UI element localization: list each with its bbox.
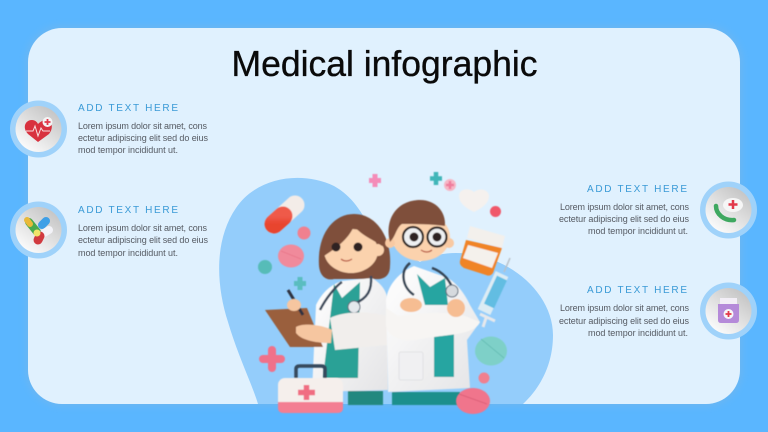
pink tablet bottom xyxy=(456,388,490,414)
icon: heart xyxy=(459,189,489,212)
body text: Lorem ipsum dolor sit amet, cons xyxy=(78,223,208,233)
scrubs xyxy=(417,274,448,305)
coat xyxy=(312,278,388,392)
hair back xyxy=(319,214,390,279)
crossed arms xyxy=(386,308,480,340)
icon: red dot xyxy=(490,206,501,217)
icon: small pink cross xyxy=(444,179,456,191)
body text: ectetur adipiscing elit sed do eius xyxy=(559,316,690,326)
clipboard xyxy=(265,308,323,347)
icon: medical folder xyxy=(700,282,757,340)
icon: teal cross xyxy=(294,277,306,290)
icon: pink cross top xyxy=(369,174,381,187)
doctor: male xyxy=(385,200,480,405)
body text: ectetur adipiscing elit sed do eius xyxy=(78,133,208,143)
icon: capsule xyxy=(274,204,296,224)
body text xyxy=(559,303,690,338)
stethoscope xyxy=(403,263,452,295)
icon: heart xyxy=(10,100,67,158)
face xyxy=(324,229,378,273)
body text: mod tempor incididunt ut. xyxy=(588,226,688,236)
heading: ADD TEXT HERE xyxy=(78,103,178,114)
icon: teal cross top xyxy=(430,172,442,185)
body text: ectetur adipiscing elit sed do eius xyxy=(559,214,690,224)
floating medical elements xyxy=(258,172,510,384)
icon: small dot xyxy=(478,372,490,384)
heading: ADD TEXT HERE xyxy=(587,285,687,296)
icon: pink cross xyxy=(263,350,281,368)
body text: mod tempor incididunt ut. xyxy=(588,328,688,338)
scrubs xyxy=(323,282,360,378)
icon: teal dot xyxy=(258,260,272,274)
icon: phone xyxy=(700,182,757,238)
hand and pen xyxy=(287,290,388,350)
coat xyxy=(386,266,480,392)
body text: ectetur adipiscing elit sed do eius xyxy=(78,235,208,245)
pocket xyxy=(399,352,423,380)
icon: pink tablet xyxy=(278,244,304,268)
item 4 xyxy=(559,282,757,340)
icon: pills xyxy=(10,202,67,258)
body text xyxy=(559,202,690,236)
icon: syringe xyxy=(480,258,510,327)
body text: mod tempor incididunt ut. xyxy=(78,145,178,155)
glasses xyxy=(403,227,446,247)
item 3 xyxy=(559,182,757,238)
body text: Lorem ipsum dolor sit amet, cons xyxy=(78,121,208,131)
doctor: female xyxy=(265,214,390,405)
icon: medicine bottle xyxy=(460,226,505,276)
hair xyxy=(389,200,445,242)
stethoscope xyxy=(320,276,371,310)
icon: small pink dot xyxy=(298,226,310,240)
background blob xyxy=(219,178,553,404)
body text xyxy=(78,121,208,155)
body text: Lorem ipsum dolor sit amet, cons xyxy=(560,303,690,313)
body text: Lorem ipsum dolor sit amet, cons xyxy=(560,202,690,212)
body text: mod tempor incididunt ut. xyxy=(78,248,178,258)
face xyxy=(392,213,450,261)
icon: teal tablet xyxy=(475,336,507,366)
heading: ADD TEXT HERE xyxy=(78,205,178,216)
title: Medical infographic xyxy=(232,43,538,84)
item 2 xyxy=(10,202,208,258)
body text xyxy=(78,223,208,258)
heading: ADD TEXT HERE xyxy=(587,184,687,195)
first aid kit xyxy=(278,366,343,413)
item 1 xyxy=(10,100,208,158)
